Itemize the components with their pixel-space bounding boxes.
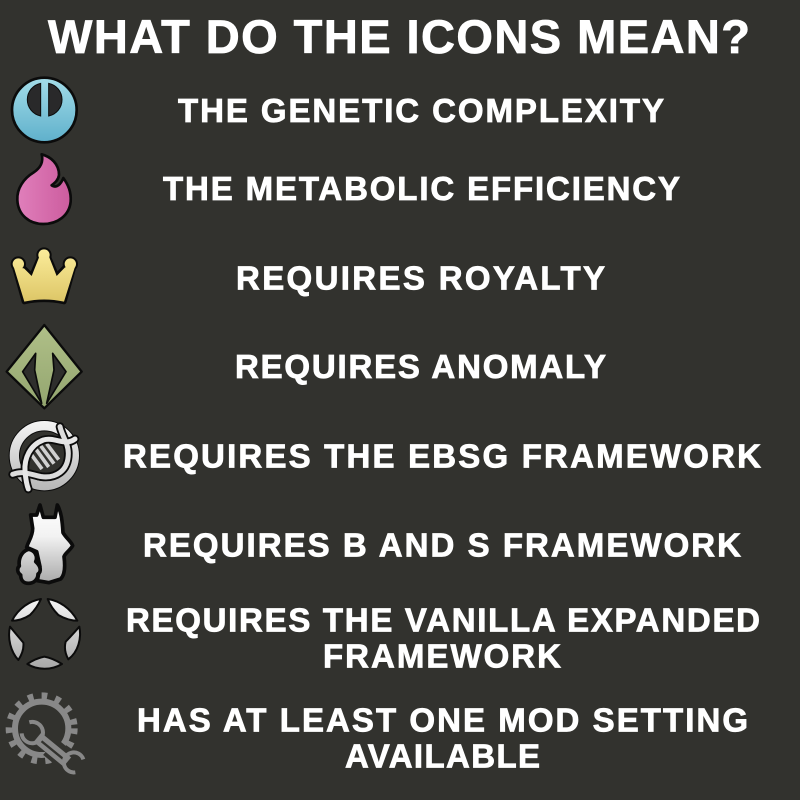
icon: royalty crown xyxy=(13,249,76,302)
label: available line two: AVAILABLE xyxy=(345,738,540,774)
label: requires anomaly: REQUIRES ANOMALY xyxy=(235,348,606,385)
icon: genetic complexity xyxy=(12,78,77,142)
label: requires EBSG framework: REQUIRES THE EBSG FRAMEWORK xyxy=(123,438,761,474)
label: requires B and S framework: REQUIRES B AND S FRAMEWORK xyxy=(143,526,741,564)
label: mod setting available: HAS AT LEAST ONE MOD SETTING xyxy=(137,702,748,738)
title: WHAT DO THE ICONS MEAN? xyxy=(48,10,750,63)
icon: Vanilla Expanded framework xyxy=(9,599,80,669)
icon: metabolic efficiency xyxy=(17,154,71,224)
icon: B and S framework xyxy=(18,505,73,583)
label: genetic complexity: THE GENETIC COMPLEXITY xyxy=(178,92,664,129)
icon: mod settings gear xyxy=(9,696,83,772)
label: framework line two: FRAMEWORK xyxy=(323,638,561,674)
label: requires royalty: REQUIRES ROYALTY xyxy=(236,260,605,296)
icon: EBSG framework xyxy=(13,426,75,489)
icon: anomaly xyxy=(7,325,82,408)
label: requires Vanilla Expanded framework: REQUIRES THE VANILLA EXPANDED xyxy=(126,602,760,638)
label: metabolic efficiency: THE METABOLIC EFFICIENCY xyxy=(163,170,680,207)
